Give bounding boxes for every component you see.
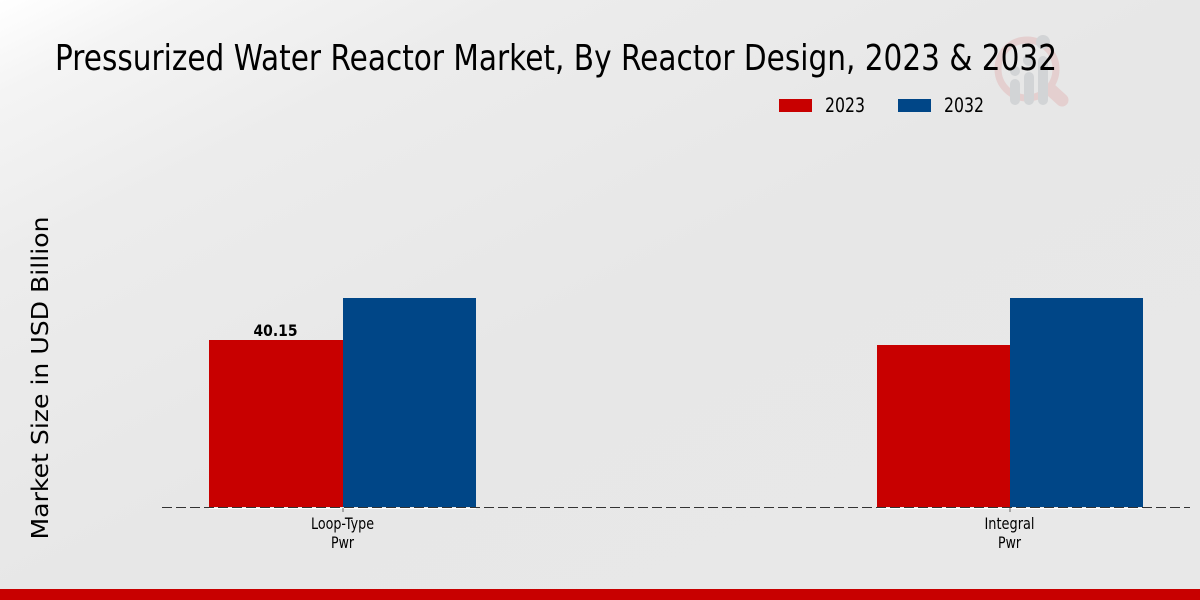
category label: Integral Pwr: Integral (984, 514, 1034, 533)
footer bar (0, 589, 1200, 600)
icon: watermark magnifier logo (998, 35, 1062, 105)
category label: Integral Pwr: Pwr (998, 533, 1021, 552)
bar: Loop-Type Pwr 2023 (209, 340, 343, 507)
category label: Integral Pwr (984, 514, 1034, 552)
data label: 40.15 (254, 321, 298, 340)
bar: Integral Pwr 2023 (877, 345, 1010, 507)
legend item: 2023: 2023 (825, 94, 865, 117)
bar: Loop-Type Pwr 2032 (343, 298, 476, 507)
category label: Loop-Type Pwr: Pwr (331, 533, 354, 552)
title: Pressurized Water Reactor Market, By Reactor Design, 2023 & 2032 (55, 38, 1057, 79)
category label: Loop-Type Pwr: Loop-Type (311, 514, 374, 533)
baseline (162, 506, 1190, 508)
category label: Loop-Type Pwr (311, 514, 374, 552)
y axis label: Market Size in USD Billion (28, 216, 54, 540)
bar: Integral Pwr 2032 (1010, 298, 1143, 507)
legend item: 2032: 2032 (944, 94, 984, 117)
legend (779, 94, 984, 117)
legend item: 2023 (779, 94, 865, 117)
legend item: 2032 (898, 94, 984, 117)
bar chart (162, 298, 1190, 552)
